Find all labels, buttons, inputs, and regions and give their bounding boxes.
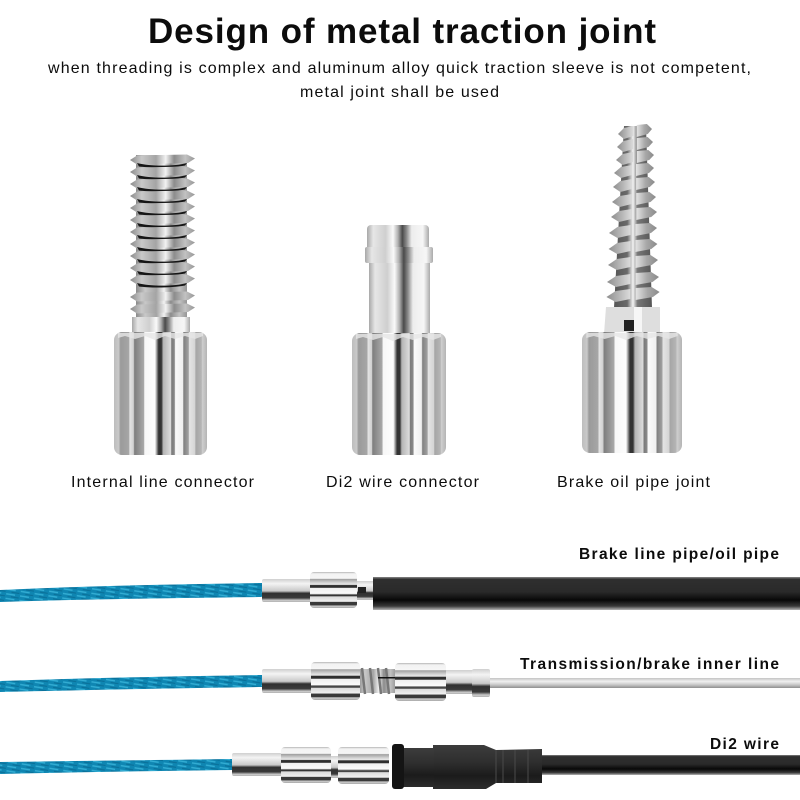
label: brake oil pipe joint: Brake oil pipe joint <box>557 474 711 491</box>
black pipe <box>373 577 800 610</box>
label: Di2 wire connector: Di2 wire connector <box>326 474 480 491</box>
knurled head left <box>311 662 360 700</box>
assembly: brake line pipe <box>0 572 800 610</box>
subtitle: when threading is complex and aluminum alloy quick traction sleeve is not competent, <box>47 60 751 77</box>
title: Design of metal traction joint <box>148 12 656 51</box>
assembly: Di2 wire <box>0 744 800 789</box>
ferrule left <box>262 669 312 693</box>
product: internal line connector <box>114 154 207 455</box>
thread stub <box>356 581 373 600</box>
black wire <box>540 755 800 775</box>
knurled head right <box>338 747 389 784</box>
threaded shaft <box>130 154 195 333</box>
label: transmission/brake inner line: Transmission/brake inner line <box>520 656 779 673</box>
knurled head right <box>395 663 446 701</box>
neck <box>369 255 430 335</box>
link <box>330 756 339 778</box>
end cap <box>472 669 490 697</box>
label: internal line connector: Internal line connector <box>71 474 255 491</box>
black connector body <box>392 744 542 789</box>
ferrule right <box>445 670 475 694</box>
knurled head <box>310 572 357 608</box>
ring <box>365 247 433 263</box>
blue cable <box>0 583 263 602</box>
label: brake line pipe: Brake line pipe/oil pipe <box>579 546 779 563</box>
label: Di2 wire: Di2 wire <box>710 736 779 753</box>
subtitle: metal joint shall be used <box>300 84 499 101</box>
ferrule <box>232 753 282 776</box>
top cap <box>367 225 429 253</box>
collar <box>604 307 660 334</box>
product: brake oil pipe joint <box>582 124 682 453</box>
knurled head <box>582 332 682 453</box>
screw thread <box>606 124 660 308</box>
knurled head <box>114 332 207 455</box>
blue cable <box>0 759 233 774</box>
assembly: transmission/brake inner line <box>0 662 800 701</box>
product: Di2 wire connector <box>352 225 446 455</box>
knurled head <box>352 333 446 455</box>
ferrule <box>262 579 312 602</box>
blue cable <box>0 675 263 692</box>
subtitle <box>47 60 751 101</box>
knurled head left <box>281 747 331 783</box>
exposed thread <box>358 668 396 694</box>
grey inner line <box>488 678 800 688</box>
